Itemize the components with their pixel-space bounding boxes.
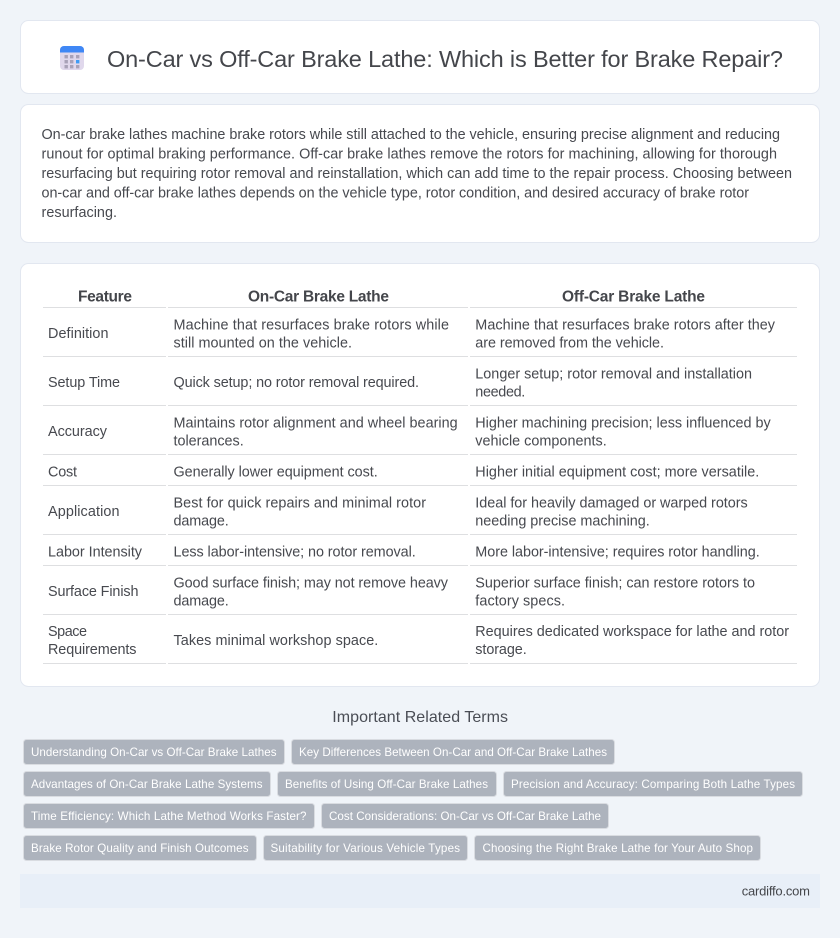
tag xyxy=(24,804,314,828)
heading: important related terms: Important Related Terms xyxy=(332,709,508,726)
row: labor intensity: More labor-intensive; requires rotor handling. xyxy=(475,544,760,560)
row: setup time: Quick setup; no rotor removal required. xyxy=(174,375,419,391)
table header xyxy=(78,288,705,306)
tag: Choosing the Right Brake Lathe for Your Auto Shop xyxy=(482,842,753,855)
text block: introduction paragraph xyxy=(42,127,792,221)
row: cost: Cost xyxy=(48,464,77,480)
row: labor intensity: Less labor-intensive; no rotor removal. xyxy=(174,544,416,560)
row: accuracy: Maintains rotor alignment and wheel bearing xyxy=(174,415,458,431)
row: setup time: Longer setup; rotor removal and installation xyxy=(475,366,752,382)
table header: Feature xyxy=(78,288,132,306)
row: setup time xyxy=(48,366,752,400)
icon: calendar xyxy=(60,46,84,70)
tag xyxy=(24,740,284,764)
row: space requirements: Requirements xyxy=(48,642,136,658)
panel: related term tags xyxy=(24,740,802,860)
tag xyxy=(24,772,270,796)
panel: introduction xyxy=(20,104,820,242)
row: accuracy: tolerances. xyxy=(174,433,244,449)
row: space requirements: Takes minimal workshop space. xyxy=(174,633,378,649)
row: setup time: Setup Time xyxy=(48,375,120,391)
row: surface finish: Superior surface finish; can restore rotors to xyxy=(475,575,755,591)
tag: Cost Considerations: On-Car vs Off-Car Brake Lathe xyxy=(329,810,601,823)
row: surface finish: damage. xyxy=(174,593,229,609)
tag xyxy=(264,836,468,860)
row: application: Ideal for heavily damaged or warped rotors xyxy=(475,495,748,511)
row: setup time: needed. xyxy=(475,384,525,400)
text block: introduction paragraph: runout for optimal braking performance. Off-car brake lathes remove the rotors for machining, allowing for thorough xyxy=(42,146,777,162)
table header: On-Car Brake Lathe xyxy=(248,288,389,306)
footer source text: cardiffo.com xyxy=(742,883,810,898)
row: space requirements: storage. xyxy=(475,642,527,658)
row: space requirements: Requires dedicated workspace for lathe and rotor xyxy=(475,624,789,640)
row: definition xyxy=(48,317,776,351)
tag: Benefits of Using Off-Car Brake Lathes xyxy=(285,778,488,791)
tag xyxy=(292,740,614,764)
row: surface finish xyxy=(48,575,755,609)
tag: Suitability for Various Vehicle Types xyxy=(270,842,460,855)
tag xyxy=(278,772,496,796)
row: application: damage. xyxy=(174,513,229,529)
tag xyxy=(474,836,760,860)
row: labor intensity xyxy=(48,544,760,560)
row: definition: are removed from the vehicle. xyxy=(475,335,664,351)
row: application xyxy=(48,495,748,529)
row: surface finish: Good surface finish; may not remove heavy xyxy=(174,575,449,591)
row: application: needing precise machining. xyxy=(475,513,650,529)
tag: Understanding On-Car vs Off-Car Brake Lathes xyxy=(31,746,277,759)
panel: title card xyxy=(20,20,820,94)
table header: Off-Car Brake Lathe xyxy=(562,288,705,306)
tag xyxy=(322,804,608,828)
row: definition: Machine that resurfaces brake rotors after they xyxy=(475,317,776,333)
row: cost: Higher initial equipment cost; more versatile. xyxy=(475,464,759,480)
row: surface finish: Surface Finish xyxy=(48,584,138,600)
tag: Time Efficiency: Which Lathe Method Works Faster? xyxy=(31,810,307,823)
tag xyxy=(504,772,802,796)
row: definition: Definition xyxy=(48,326,108,342)
row: application: Application xyxy=(48,504,120,520)
row: definition: still mounted on the vehicle. xyxy=(174,335,352,351)
tag: Advantages of On-Car Brake Lathe Systems xyxy=(31,778,263,791)
footer xyxy=(20,874,820,908)
row: accuracy: vehicle components. xyxy=(475,433,607,449)
tag xyxy=(24,836,256,860)
row: application: Best for quick repairs and minimal rotor xyxy=(174,495,426,511)
text block: introduction paragraph: on-car and off-car brake lathes depends on the vehicle type, rotor condition, and desired accuracy of brake rotor xyxy=(42,186,749,202)
tag: Brake Rotor Quality and Finish Outcomes xyxy=(31,842,249,855)
text block: introduction paragraph: resurfacing but requiring rotor removal and reinstallation, which can add time to the repair process. Choosing between xyxy=(42,166,792,182)
row: surface finish: factory specs. xyxy=(475,593,565,609)
text block: introduction paragraph: resurfacing. xyxy=(42,205,117,221)
row: labor intensity: Labor Intensity xyxy=(48,544,143,560)
row: space requirements xyxy=(48,624,789,658)
text block: introduction paragraph: On-car brake lathes machine brake rotors while still attached to the vehicle, ensuring precise alignment and reducing xyxy=(42,127,780,143)
panel: comparison table xyxy=(20,264,820,686)
row: cost xyxy=(48,464,759,480)
row: space requirements: Space xyxy=(48,624,87,640)
tag: Key Differences Between On-Car and Off-Car Brake Lathes xyxy=(299,746,607,759)
row: definition: Machine that resurfaces brake rotors while xyxy=(174,317,449,333)
row: accuracy xyxy=(48,415,771,449)
row: cost: Generally lower equipment cost. xyxy=(174,464,378,480)
tag: Precision and Accuracy: Comparing Both Lathe Types xyxy=(511,778,795,791)
row: accuracy: Higher machining precision; less influenced by xyxy=(475,415,771,431)
title: On-Car vs Off-Car Brake Lathe: Which is Better for Brake Repair? xyxy=(107,46,783,72)
row: accuracy: Accuracy xyxy=(48,424,108,440)
